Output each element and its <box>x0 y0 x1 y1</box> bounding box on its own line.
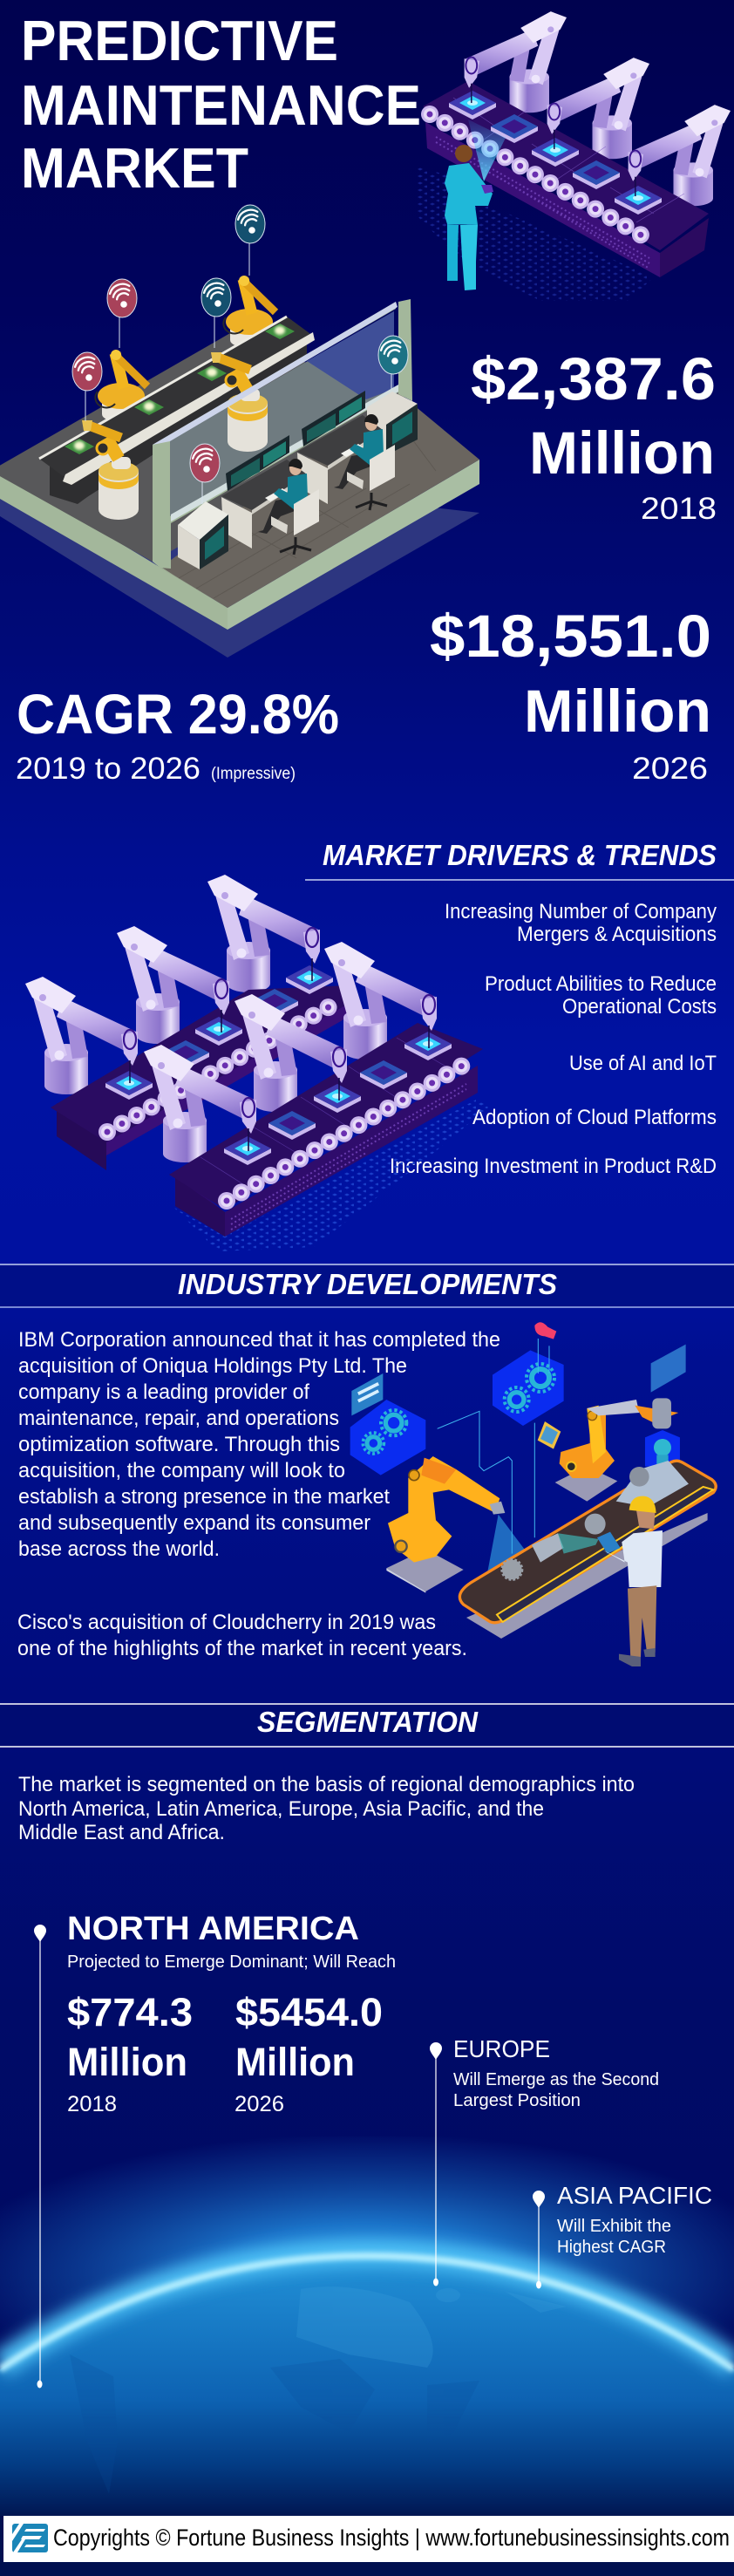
stat: CAGR <box>16 683 339 786</box>
pin: Asia Pacific <box>533 2191 545 2288</box>
text block: Cisco acquisition: Cisco's acquisition of Cloudcherry in 2019 was <box>17 1611 436 1634</box>
text block: IBM acquisition: and subsequently expand its consumer <box>18 1511 370 1535</box>
illustration: purple robot conveyor with engineer <box>415 11 731 301</box>
icon: wifi pin teal <box>378 336 408 389</box>
text block: segmentation intro <box>18 1773 635 1844</box>
stat: CAGR: CAGR 29.8% <box>17 683 339 746</box>
list: market drivers: Operational Costs <box>562 995 717 1019</box>
segment: North America: Million <box>235 2040 355 2084</box>
stat: CAGR: (Impressive) <box>211 765 296 783</box>
stat: 2018 market value <box>471 345 717 526</box>
heading: market drivers and trends: MARKET DRIVERS & TRENDS <box>323 839 717 871</box>
text block: segmentation intro: The market is segmented on the basis of regional demographics into <box>18 1773 635 1796</box>
icon: wifi pin teal <box>201 278 231 348</box>
list: market drivers: Product Abilities to Reduce <box>485 972 717 996</box>
pin: Europe <box>430 2042 442 2286</box>
segment: North America: Million <box>67 2040 187 2084</box>
list: market drivers <box>390 900 717 1178</box>
list: market drivers: Adoption of Cloud Platforms <box>472 1106 717 1129</box>
text block: IBM acquisition: establish a strong presence in the market <box>18 1485 390 1509</box>
footer strip background <box>0 2516 734 2576</box>
icon: wifi pin red <box>107 279 137 348</box>
stat: 2018 market value: Million <box>529 419 715 487</box>
stat: 2018 market value: $2,387.6 <box>471 345 716 412</box>
illustration: two rows of purple robot conveyors <box>25 875 488 1251</box>
text block: segmentation intro: North America, Latin America, Europe, Asia Pacific, and the <box>18 1797 544 1821</box>
text block: IBM acquisition: maintenance, repair, and operations <box>18 1407 339 1430</box>
list: market drivers: Increasing Investment in Product R&D <box>390 1155 717 1178</box>
segment: Europe: Largest Position <box>453 2091 581 2110</box>
segment: Asia Pacific: Will Exhibit the <box>557 2217 671 2236</box>
heading band: segmentation <box>0 1704 734 1747</box>
segment: North America: 2018 <box>67 2092 117 2116</box>
segment: North America: 2026 <box>234 2092 284 2116</box>
text block: IBM acquisition: optimization software. Through this <box>18 1433 340 1456</box>
title: MARKET <box>21 136 248 200</box>
text block: IBM acquisition: company is a leading provider of <box>18 1380 309 1404</box>
footer bar <box>3 2516 734 2562</box>
text block: IBM acquisition: base across the world. <box>18 1537 220 1561</box>
text block: IBM acquisition: IBM Corporation announced that it has completed the <box>18 1328 500 1352</box>
segment: Europe <box>453 2035 659 2110</box>
list: market drivers: Mergers & Acquisitions <box>517 923 717 946</box>
text block: segmentation intro: Middle East and Africa. <box>18 1821 225 1844</box>
text block: IBM acquisition <box>18 1328 500 1561</box>
list: market drivers: Increasing Number of Company <box>445 900 717 923</box>
segment: North America: $5454.0 <box>235 1990 383 2034</box>
segment: Asia Pacific <box>557 2182 712 2257</box>
icon: wifi pin teal <box>235 205 265 276</box>
text block: IBM acquisition: acquisition of Oniqua Holdings Pty Ltd. The <box>18 1354 407 1378</box>
segment: Asia Pacific: Highest CAGR <box>557 2238 666 2257</box>
icon: wifi pin red <box>72 352 102 421</box>
stat: 2018 market value: 2018 <box>641 492 717 526</box>
pin: North America <box>34 1925 46 2388</box>
stat: 2026 market value: $18,551.0 <box>430 603 711 670</box>
heading band: industry developments <box>0 1264 734 1307</box>
icon: wifi pin red <box>190 444 220 504</box>
stat: 2026 market value: 2026 <box>632 752 708 786</box>
segment: North America: NORTH AMERICA <box>67 1911 359 1947</box>
segment: Europe: Will Emerge as the Second <box>453 2070 659 2089</box>
title: MAINTENANCE <box>21 73 421 137</box>
illustration: glowing globe <box>0 2136 734 2516</box>
segment: Asia Pacific: ASIA PACIFIC <box>557 2182 712 2209</box>
icon: Fortune Business Insights logo <box>12 2524 48 2552</box>
segment: North America <box>67 1911 396 2116</box>
illustration: smart factory floor <box>0 276 479 658</box>
heading band: industry developments: INDUSTRY DEVELOPMENTS <box>178 1268 557 1300</box>
stat: CAGR: 2019 to 2026 <box>16 752 200 786</box>
text block: Cisco acquisition <box>17 1611 467 1660</box>
heading band: segmentation: SEGMENTATION <box>257 1706 479 1738</box>
title: PREDICTIVE <box>21 9 338 72</box>
text block: IBM acquisition: acquisition, the company will look to <box>18 1459 345 1482</box>
illustration: industrial robots, gears and worker <box>350 1322 716 1666</box>
stat: 2026 market value <box>430 603 711 786</box>
title <box>21 9 421 200</box>
segment: North America: $774.3 <box>67 1990 193 2034</box>
stat: 2026 market value: Million <box>524 678 711 745</box>
segment: Europe: EUROPE <box>453 2035 550 2062</box>
segment: North America: Projected to Emerge Dominant; Will Reach <box>67 1952 396 1972</box>
text block: Cisco acquisition: one of the highlights of the market in recent years. <box>17 1637 467 1660</box>
list: market drivers: Use of AI and IoT <box>569 1052 717 1075</box>
